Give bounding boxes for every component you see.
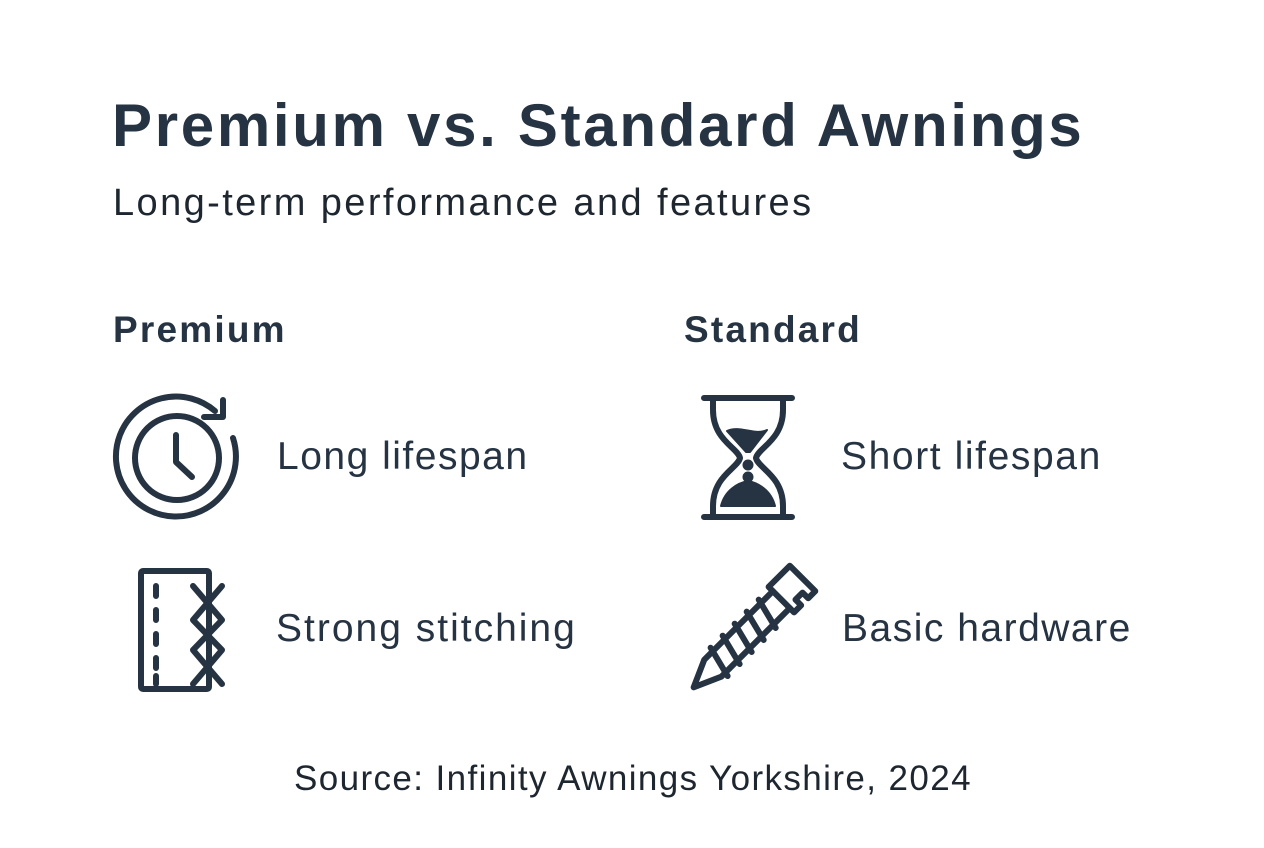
source: Source: Infinity Awnings Yorkshire, 2024 [294, 759, 972, 798]
heading: premium: Premium [113, 309, 287, 350]
title: Premium vs. Standard Awnings [112, 92, 1084, 159]
icon: screw [690, 562, 818, 690]
icon: hourglass [701, 395, 795, 520]
text: short lifespan: Short lifespan [841, 435, 1102, 478]
text: strong stitching: Strong stitching [276, 607, 577, 650]
heading: standard: Standard [684, 309, 862, 350]
subtitle: Long-term performance and features [113, 182, 814, 224]
text: basic hardware: Basic hardware [842, 607, 1132, 650]
icon: stitching [138, 568, 225, 692]
text: long lifespan: Long lifespan [277, 435, 529, 478]
icon: clock with arrow [112, 394, 239, 520]
